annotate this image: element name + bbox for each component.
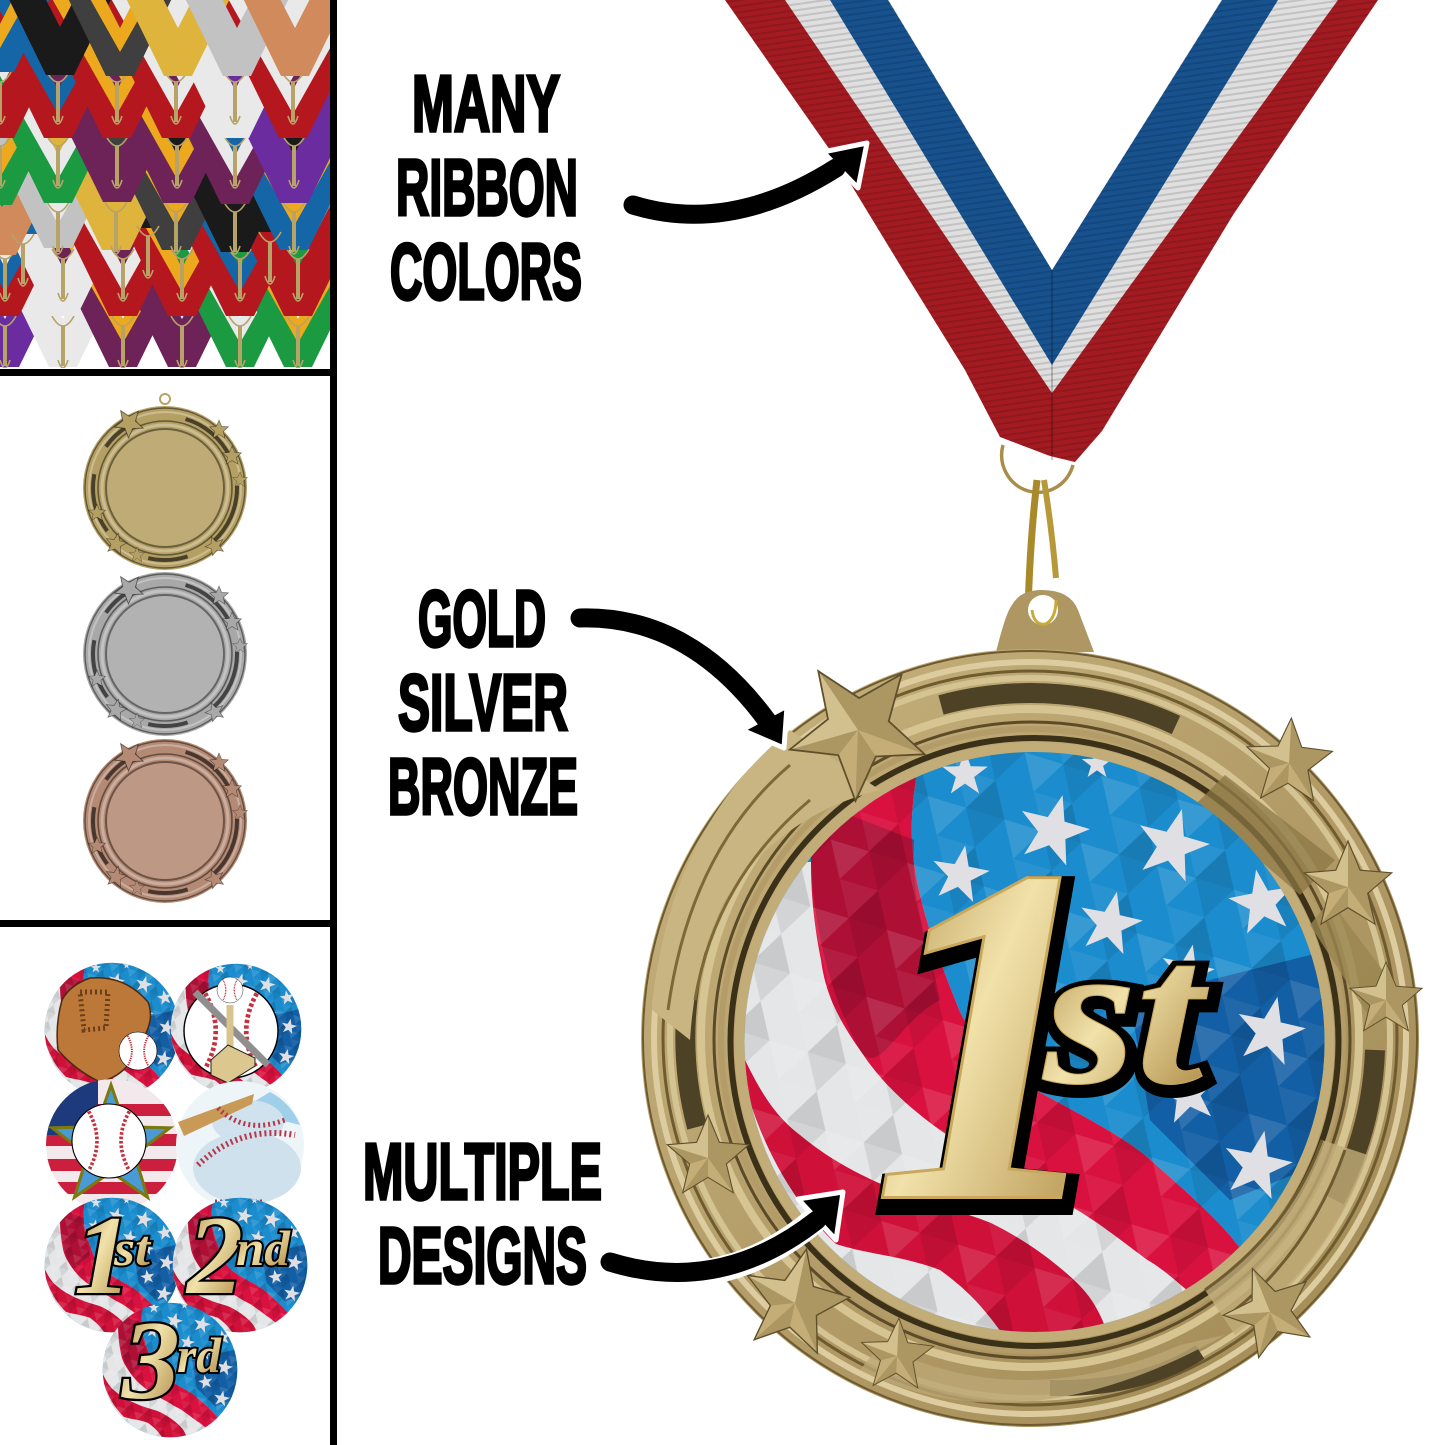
design: 3rd place <box>92 1299 241 1445</box>
design: 3rd place: rd <box>177 1327 222 1383</box>
panel: insert designs <box>34 960 311 1445</box>
medal insert: 1st emblem: st <box>1044 904 1211 1131</box>
heading: many ribbon colors: COLORS <box>390 227 582 316</box>
arrow: to ribbon <box>630 143 867 216</box>
design: baseball glove <box>34 960 183 1118</box>
ribbon row: third row <box>0 72 330 205</box>
heading: multiple designs: DESIGNS <box>378 1211 587 1300</box>
medal insert: 1st emblem: 1 <box>873 768 1111 1300</box>
thumbnail: silver medal <box>83 569 248 736</box>
design: baseball and bat <box>176 1081 304 1209</box>
medal insert: 1st emblem <box>873 768 1211 1308</box>
panel dividers <box>0 0 337 1445</box>
heading: multiple designs <box>363 1127 602 1300</box>
medal loop <box>996 590 1094 652</box>
thumbnail: bronze medal <box>83 736 248 903</box>
ribbon row: second row <box>0 0 330 138</box>
ribbon row: fifth row <box>0 206 330 316</box>
arrow: to medal insert <box>608 1192 843 1274</box>
heading: gold silver bronze <box>388 574 578 831</box>
medal stars <box>667 633 1422 1389</box>
thumbnail: gold medal <box>83 394 248 570</box>
medal insert: flag <box>700 740 1340 1420</box>
panel: ribbon colors swatches <box>0 0 330 368</box>
medal rim <box>641 649 1419 1427</box>
heading: many ribbon colors: RIBBON <box>396 143 578 232</box>
heading: gold silver bronze: BRONZE <box>388 742 578 831</box>
ribbon: red white blue lanyard <box>725 0 1378 462</box>
design: 2nd place: 2 <box>185 1194 243 1318</box>
arrow: to medal finish <box>580 618 787 748</box>
design: 1st place <box>34 1194 183 1353</box>
medal insert: 1st emblem: 1 <box>877 776 1115 1308</box>
design: 1st place: 1 <box>74 1194 132 1318</box>
design: 2nd place: nd <box>236 1220 291 1276</box>
medal hardware: ring and clip <box>1002 445 1073 612</box>
panel: gold silver bronze medal thumbnails <box>83 394 248 903</box>
heading: gold silver bronze: SILVER <box>398 658 568 747</box>
design: baseball on star <box>46 1079 177 1204</box>
large medal <box>641 590 1422 1427</box>
medal insert: 1st emblem: st <box>1042 900 1209 1127</box>
design: bat and tee baseball <box>161 961 305 1114</box>
heading: multiple designs: MULTIPLE <box>363 1127 602 1216</box>
heading: many ribbon colors: MANY <box>412 59 560 148</box>
ribbon row: top row <box>0 0 330 76</box>
design: 2nd place <box>162 1194 311 1353</box>
design: 1st place: st <box>113 1220 152 1276</box>
design: 3rd place: 3 <box>121 1299 180 1423</box>
heading: gold silver bronze: GOLD <box>418 574 546 663</box>
ribbon row: bottom row <box>0 230 330 368</box>
heading: many ribbon colors <box>390 59 582 316</box>
ribbon row: fourth row <box>0 138 330 287</box>
